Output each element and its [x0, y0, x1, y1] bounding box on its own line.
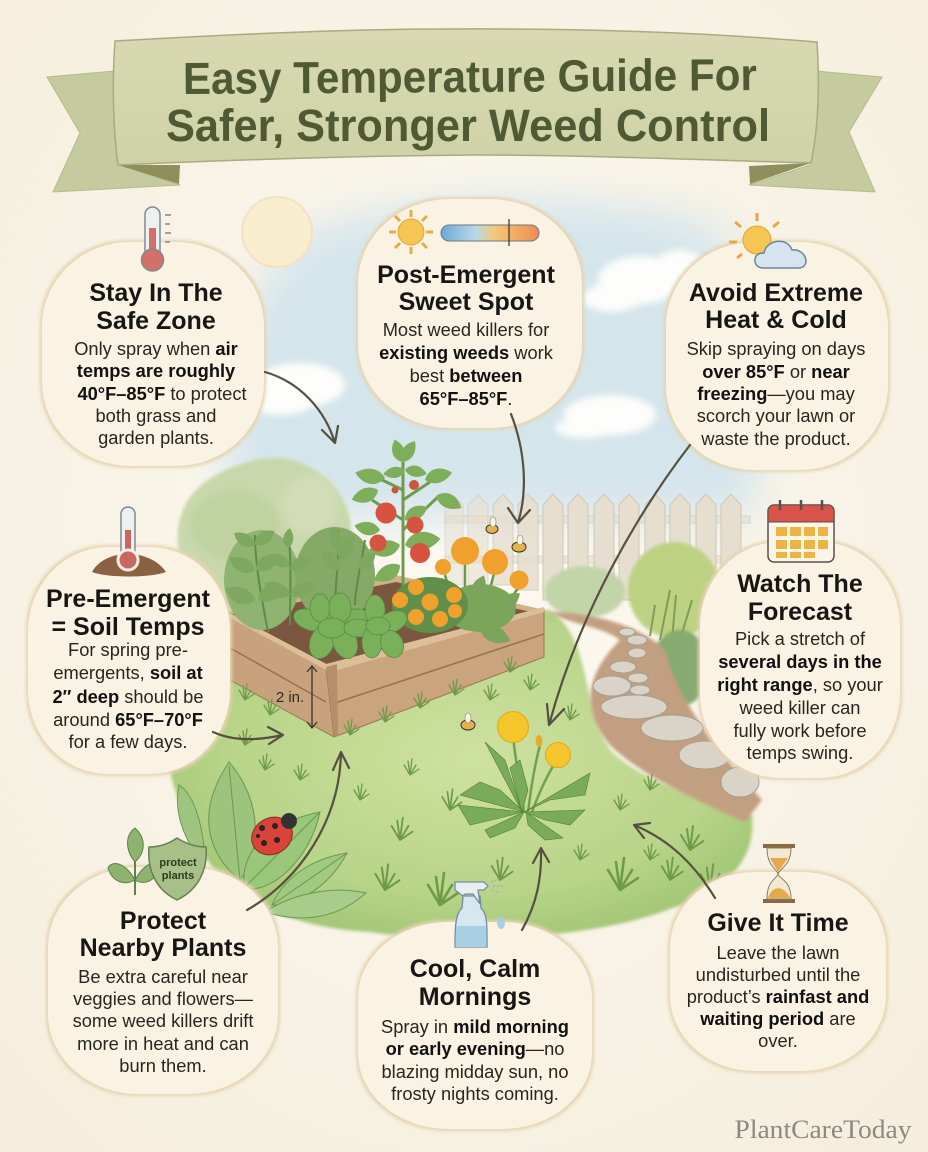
title: Safer, Stronger Weed Control	[166, 100, 770, 151]
icon: shield: plants	[162, 870, 194, 882]
tomato plant	[350, 438, 465, 590]
left ribbon tail	[47, 71, 180, 192]
arrow: post-emergent to weeds	[508, 414, 530, 523]
text: avoid extreme: Heat & Cold	[705, 306, 847, 334]
garden scene	[166, 438, 762, 939]
hedge	[178, 458, 351, 650]
text: give it time: product’s rainfast and	[687, 986, 869, 1007]
title banner	[47, 29, 882, 192]
clouds	[245, 250, 706, 438]
background shrubs	[545, 542, 720, 706]
text: post-emergent: 65°F–85°F.	[420, 388, 512, 409]
text: post-emergent: best between	[410, 365, 522, 386]
foreground leaves	[177, 762, 366, 918]
text: pre-emergent: for a few days.	[69, 731, 187, 752]
text: avoid extreme: waste the product.	[700, 428, 851, 449]
text: stay in the safe zone: both grass and	[96, 405, 216, 426]
text: watch the forecast: right range, so your	[717, 674, 883, 695]
bees	[461, 517, 526, 730]
herbs	[222, 525, 380, 632]
text: stay in the safe zone	[74, 279, 247, 448]
arrow: mornings to dandelion	[522, 848, 549, 930]
arrow: soil temps to bed	[213, 727, 283, 744]
text: stay in the safe zone: Safe Zone	[96, 307, 216, 335]
panel: give it time	[668, 846, 888, 1073]
raised garden bed	[228, 575, 544, 737]
panel: protect nearby plants	[46, 828, 280, 1096]
text: protect nearby plants	[73, 907, 254, 1076]
arrow: give it time to lawn	[634, 823, 715, 898]
title: Easy Temperature Guide For	[183, 49, 757, 104]
text: cool calm mornings	[381, 955, 569, 1104]
text: watch the forecast: several days in the	[718, 651, 882, 672]
icon: spray bottle	[455, 879, 505, 947]
sky wash	[227, 197, 762, 520]
text: avoid extreme: freezing—you may	[697, 383, 856, 404]
text: watch the forecast: fully work before	[733, 720, 867, 741]
left fold	[118, 165, 180, 184]
ladybug	[245, 810, 299, 862]
text: post-emergent: Sweet Spot	[399, 288, 534, 316]
icon: seedling	[108, 828, 160, 895]
marigolds	[392, 537, 528, 648]
text: pre-emergent: = Soil Temps	[51, 613, 205, 641]
panel: stay in the safe zone	[40, 207, 266, 468]
icon: sun	[389, 210, 433, 254]
text: pre-emergent: emergents, soil at	[53, 662, 203, 683]
text: post-emergent: Post-Emergent	[377, 261, 556, 289]
right fold	[749, 163, 811, 184]
text: protect nearby plants: burn them.	[119, 1055, 207, 1076]
rim front	[228, 607, 544, 672]
text: avoid extreme: Skip spraying on days	[687, 338, 865, 359]
text: stay in the safe zone: 40°F–85°F to protect	[77, 383, 247, 404]
text: watch the forecast: Pick a stretch of	[735, 628, 866, 649]
text: watch the forecast: Watch The	[737, 570, 863, 598]
icon: calendar	[768, 500, 834, 562]
panel: watch the forecast	[698, 500, 902, 780]
text: pre-emergent: Pre-Emergent	[46, 585, 211, 613]
icon: soil thermometer	[92, 507, 166, 576]
text: give it time	[687, 909, 869, 1051]
2 inch depth marker: 2 in.	[276, 689, 304, 706]
text: pre-emergent	[46, 585, 211, 752]
text: give it time: undisturbed until the	[696, 964, 860, 985]
text: watch the forecast: Forecast	[748, 598, 853, 626]
panel: avoid extreme heat and cold	[664, 213, 890, 472]
text: give it time: waiting period are	[699, 1008, 856, 1029]
arrow: extreme temps to dandelion	[547, 445, 690, 725]
text: watch the forecast: weed killer can	[739, 697, 860, 718]
corner post	[326, 664, 338, 737]
text: protect nearby plants: Nearby Plants	[80, 934, 246, 962]
arrow: protect plants to bed	[247, 752, 349, 910]
footer brand: PlantCareToday	[734, 1115, 912, 1144]
text: stay in the safe zone: Stay In The	[89, 279, 223, 307]
icon: sun and cloud	[729, 213, 806, 268]
text: protect nearby plants: Be extra careful near	[78, 966, 248, 987]
left face	[228, 612, 334, 737]
icon: shield: protect	[159, 857, 197, 869]
text: stay in the safe zone: garden plants.	[98, 427, 214, 448]
right face	[326, 610, 544, 737]
icon: temperature bar	[441, 219, 539, 246]
soil	[228, 577, 544, 668]
panel: post-emergent sweet spot	[356, 197, 584, 430]
arrows	[213, 372, 715, 930]
panel: cool calm mornings	[356, 879, 594, 1131]
text: avoid extreme: scorch your lawn or	[697, 405, 855, 426]
text: avoid extreme: Avoid Extreme	[689, 279, 863, 307]
banner body	[113, 29, 818, 165]
text: give it time: Leave the lawn	[717, 942, 839, 963]
text: watch the forecast	[717, 570, 883, 763]
pale sun	[242, 197, 312, 267]
arrow: safe zone to garden	[265, 372, 338, 443]
back rim	[228, 575, 544, 615]
lawn	[166, 610, 753, 939]
text: avoid extreme: over 85°F or near	[702, 361, 850, 382]
picket fence	[445, 494, 750, 600]
text: post-emergent: existing weeds work	[379, 342, 554, 363]
title	[166, 49, 770, 151]
panel: pre-emergent soil temps	[26, 507, 232, 776]
text: post-emergent	[377, 261, 556, 409]
text: pre-emergent: For spring pre-	[68, 639, 188, 660]
text: cool calm mornings: or early evening—no	[386, 1038, 564, 1059]
icon: hourglass	[763, 846, 795, 901]
text: watch the forecast: temps swing.	[747, 742, 853, 763]
stepping stones	[593, 628, 759, 797]
text: stay in the safe zone: Only spray when air	[74, 338, 238, 359]
text: protect nearby plants: some weed killers drift	[73, 1010, 253, 1031]
text: cool calm mornings: blazing midday sun, no	[382, 1061, 568, 1082]
grass tufts	[239, 656, 724, 905]
text: cool calm mornings: frosty nights coming.	[391, 1083, 559, 1104]
right ribbon tail	[749, 71, 882, 192]
text: pre-emergent: 2″ deep should be	[52, 686, 204, 707]
plank seams	[230, 634, 544, 704]
text: protect nearby plants: veggies and flowers—	[73, 988, 254, 1009]
text: pre-emergent: around 65°F–70°F	[53, 709, 203, 730]
icon: thermometer	[142, 207, 171, 271]
text: give it time: over.	[758, 1030, 798, 1051]
dirt path	[550, 612, 762, 822]
basil	[291, 593, 411, 662]
icon: shield	[149, 838, 206, 900]
text: give it time: Give It Time	[707, 909, 849, 937]
text: cool calm mornings: Spray in mild morning	[381, 1016, 569, 1037]
text: protect nearby plants: Protect	[120, 907, 207, 935]
text: avoid extreme	[687, 279, 865, 449]
text: cool calm mornings: Mornings	[419, 983, 531, 1011]
text: cool calm mornings: Cool, Calm	[410, 955, 540, 983]
text: post-emergent: Most weed killers for	[383, 319, 549, 340]
text: stay in the safe zone: temps are roughly	[77, 360, 236, 381]
text: protect nearby plants: more in heat and can	[77, 1033, 249, 1054]
2 inch depth marker	[276, 666, 317, 728]
dandelion weed	[458, 712, 590, 840]
